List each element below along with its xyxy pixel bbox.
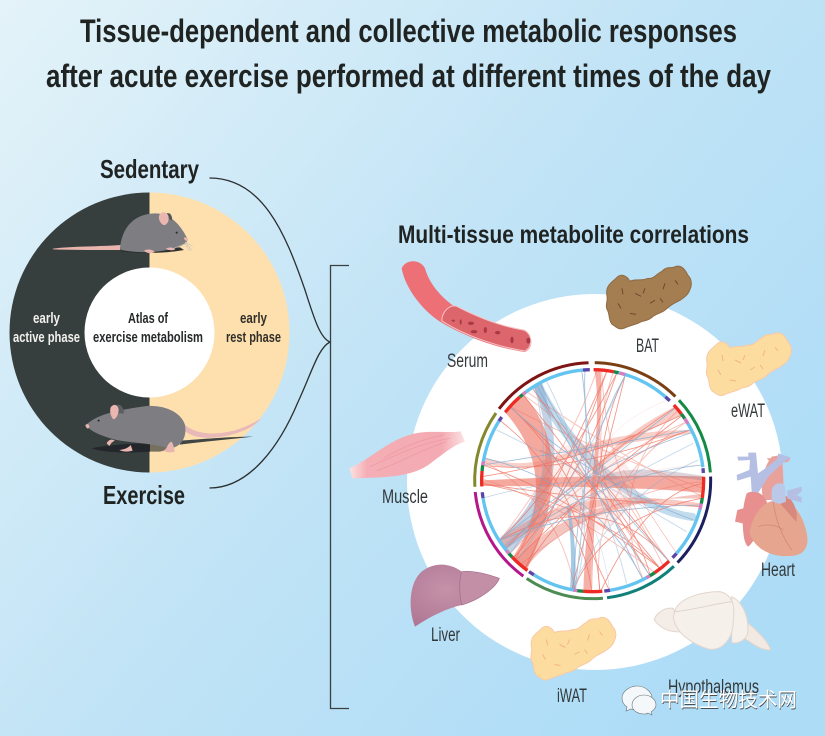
heading: multi-tissue metabolite correlations: Multi-tissue metabolite correlations (398, 221, 749, 249)
active phase half (10, 192, 150, 472)
label: atlas of exercise metabolism: Atlas of (128, 310, 169, 327)
label: Heart: Heart (761, 560, 796, 581)
rest phase half (150, 192, 290, 472)
label: early active phase: early (33, 310, 60, 327)
icon: sedentary mouse (53, 212, 193, 253)
icon: iWAT adipose (531, 617, 616, 680)
icon: eWAT adipose (706, 333, 791, 396)
extra pale chord links (481, 371, 703, 593)
label: BAT: BAT (636, 336, 659, 357)
label: Sedentary: Sedentary (100, 154, 199, 184)
icon: BAT adipose (606, 266, 691, 329)
watermark: 中国生物技术网 (660, 684, 798, 714)
icon: heart (735, 453, 807, 556)
label: early rest phase: early (240, 310, 267, 327)
icon: brain hypothalamus (654, 592, 771, 650)
label: Muscle: Muscle (382, 487, 428, 508)
icon: wechat bubbles (622, 686, 656, 715)
icon: muscle (349, 431, 465, 479)
panel: phase donut (10, 192, 290, 472)
label: Hypothalamus: Hypothalamus (668, 677, 759, 698)
thin chord links (481, 371, 703, 593)
centre circle (84, 268, 214, 398)
label: atlas of exercise metabolism (93, 310, 203, 346)
icon: serum blood vessel (402, 261, 531, 352)
outer tissue ring (426, 314, 759, 647)
chord ribbons (481, 371, 704, 592)
icon: exercising mouse (85, 405, 261, 453)
icon: liver (411, 565, 499, 627)
label: early active phase (13, 310, 80, 346)
bracket (330, 266, 349, 708)
label: early rest phase (226, 310, 281, 346)
label: iWAT: iWAT (557, 686, 587, 707)
curly brace connector (210, 178, 330, 488)
label: Exercise: Exercise (103, 480, 185, 510)
watermark: 中国生物技术网 (660, 684, 797, 712)
label: early active phase: active phase (13, 329, 80, 346)
panel: white circle backdrop (407, 294, 783, 670)
chart: chord diagram (426, 314, 759, 647)
label: Serum: Serum (447, 351, 488, 372)
title (46, 13, 771, 94)
inner metabolite class ring (482, 370, 704, 592)
label: eWAT: eWAT (731, 401, 765, 422)
label: atlas of exercise metabolism: exercise metabolism (93, 329, 203, 346)
label: Liver: Liver (431, 625, 460, 646)
label: early rest phase: rest phase (226, 329, 281, 346)
